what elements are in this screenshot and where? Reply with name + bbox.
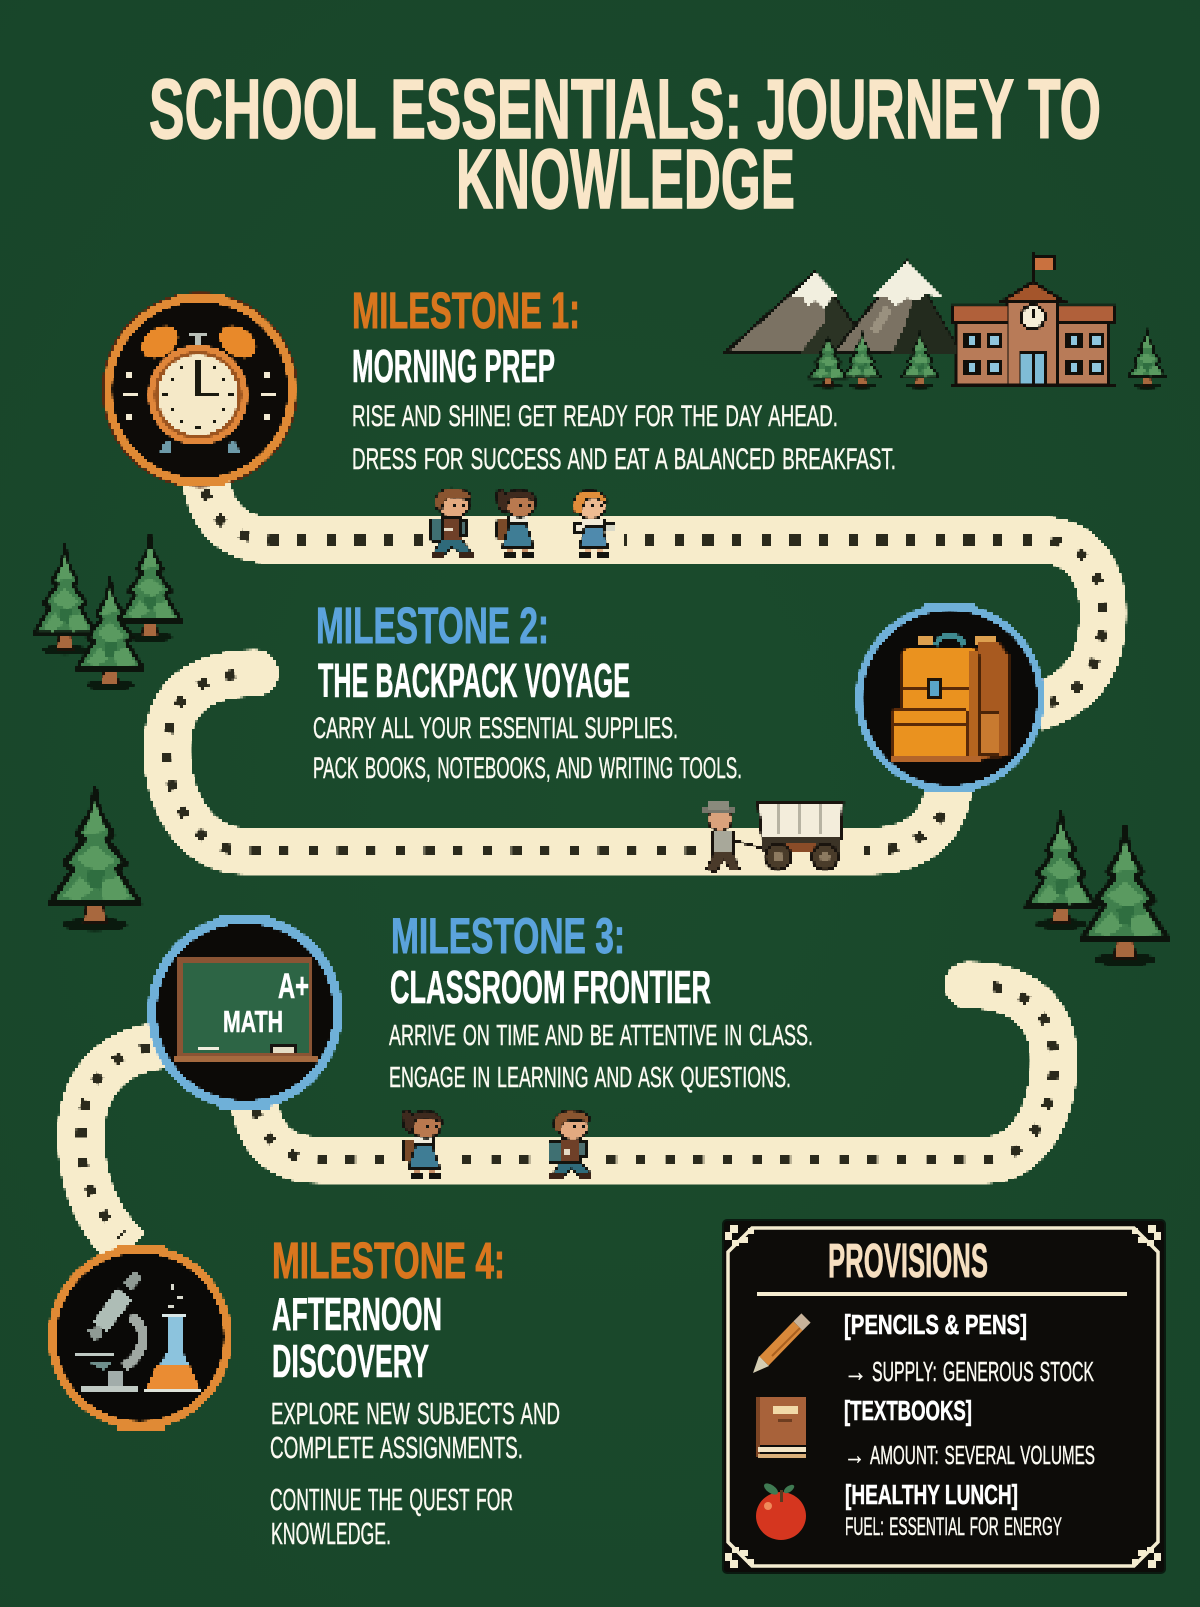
row: healthy lunch: [845, 1479, 1062, 1541]
heading: afternoon discovery: [272, 1288, 442, 1387]
gaps in trail markers: [425, 525, 623, 555]
row: textbooks: [844, 1395, 1095, 1470]
title: KNOWLEDGE: [456, 132, 795, 226]
icon: textbook: [756, 1397, 806, 1458]
pioneer: [702, 802, 762, 872]
title: [149, 62, 1101, 226]
heading: classroom frontier: CLASSROOM FRONTIER: [390, 961, 711, 1013]
chalkboard text: A+ and MATH: MATH: [223, 1004, 283, 1039]
divider: [757, 1292, 1127, 1296]
description: afternoon discovery: [270, 1396, 560, 1551]
panel: milestone 2 text: [313, 597, 742, 785]
schoolhouse: [950, 253, 1115, 386]
description: afternoon discovery: CONTINUE THE QUEST FOR: [270, 1482, 513, 1517]
icon: backpack badge: [859, 603, 1041, 793]
ornamental frame: [725, 1225, 1161, 1568]
label: milestone 3: MILESTONE 3:: [391, 908, 625, 964]
label: milestone 2: MILESTONE 2:: [316, 597, 549, 654]
description: morning prep: [352, 400, 896, 476]
label: milestone 1: MILESTONE 1:: [352, 282, 580, 339]
tree: middle left: [50, 789, 140, 931]
row: healthy lunch: [HEALTHY LUNCH]: [845, 1479, 1018, 1510]
trees: upper left cluster: [34, 535, 181, 690]
illustrated journey scene: [34, 253, 1168, 1430]
description: afternoon discovery: EXPLORE NEW SUBJECTS AND: [271, 1396, 560, 1431]
description: morning prep: RISE AND SHINE! GET READY FOR THE DAY AHEAD.: [352, 400, 838, 433]
icon: alarm clock badge: [103, 293, 297, 487]
row: pencils and pens: [PENCILS & PENS]: [844, 1309, 1027, 1340]
panel: provisions: [723, 1220, 1165, 1573]
description: morning prep: DRESS FOR SUCCESS AND EAT A BALANCED BREAKFAST.: [352, 443, 896, 476]
row: textbooks: [TEXTBOOKS]: [844, 1395, 972, 1426]
description: afternoon discovery: COMPLETE ASSIGNMENTS.: [270, 1430, 523, 1465]
icon: pencil: [753, 1318, 806, 1373]
description: classroom frontier: [389, 1020, 813, 1094]
row: textbooks: →: [844, 1440, 865, 1470]
icon: microscope and flask badge: [52, 1244, 228, 1430]
heading: afternoon discovery: AFTERNOON: [272, 1288, 442, 1340]
label: milestone 4: MILESTONE 4:: [272, 1232, 505, 1289]
pines near school: [809, 330, 1166, 389]
chalkboard text: A+ and MATH: [223, 967, 309, 1039]
panel: milestone 3 text: [389, 908, 813, 1094]
row: pencils and pens: [844, 1309, 1094, 1387]
description: classroom frontier: ENGAGE IN LEARNING AND ASK QUESTIONS.: [389, 1062, 791, 1094]
winding trail: [81, 478, 1103, 1250]
row: pencils and pens: →: [844, 1356, 867, 1387]
covered wagon: [758, 803, 843, 870]
panel: milestone 1 text: [352, 282, 896, 476]
panel: milestone 4 text: [270, 1232, 560, 1551]
chalkboard text: A+ and MATH: A+: [278, 967, 309, 1006]
description: backpack voyage: PACK BOOKS, NOTEBOOKS, AND WRITING TOOLS.: [313, 752, 742, 785]
heading: provisions: PROVISIONS: [828, 1235, 988, 1288]
panel background: [723, 1220, 1165, 1573]
heading: afternoon discovery: DISCOVERY: [272, 1335, 429, 1387]
heading: morning prep: MORNING PREP: [352, 340, 555, 392]
icon: chalkboard badge: [152, 914, 338, 1110]
characters: three students walking on the trail: [430, 489, 615, 559]
heading: the backpack voyage: THE BACKPACK VOYAGE: [318, 655, 630, 708]
mountains: [725, 262, 960, 353]
character: pioneer pulling covered wagon: [702, 802, 843, 872]
characters: two students on the lower trail: [402, 1110, 592, 1180]
icon: apple: [756, 1481, 806, 1540]
description: backpack voyage: CARRY ALL YOUR ESSENTIAL SUPPLIES.: [313, 712, 678, 745]
mountains, pines and schoolhouse: [725, 253, 1166, 389]
description: afternoon discovery: KNOWLEDGE.: [271, 1516, 391, 1551]
trees: middle right pair: [1026, 813, 1168, 966]
description: backpack voyage: [313, 712, 742, 785]
description: classroom frontier: ARRIVE ON TIME AND BE ATTENTIVE IN CLASS.: [389, 1020, 813, 1052]
